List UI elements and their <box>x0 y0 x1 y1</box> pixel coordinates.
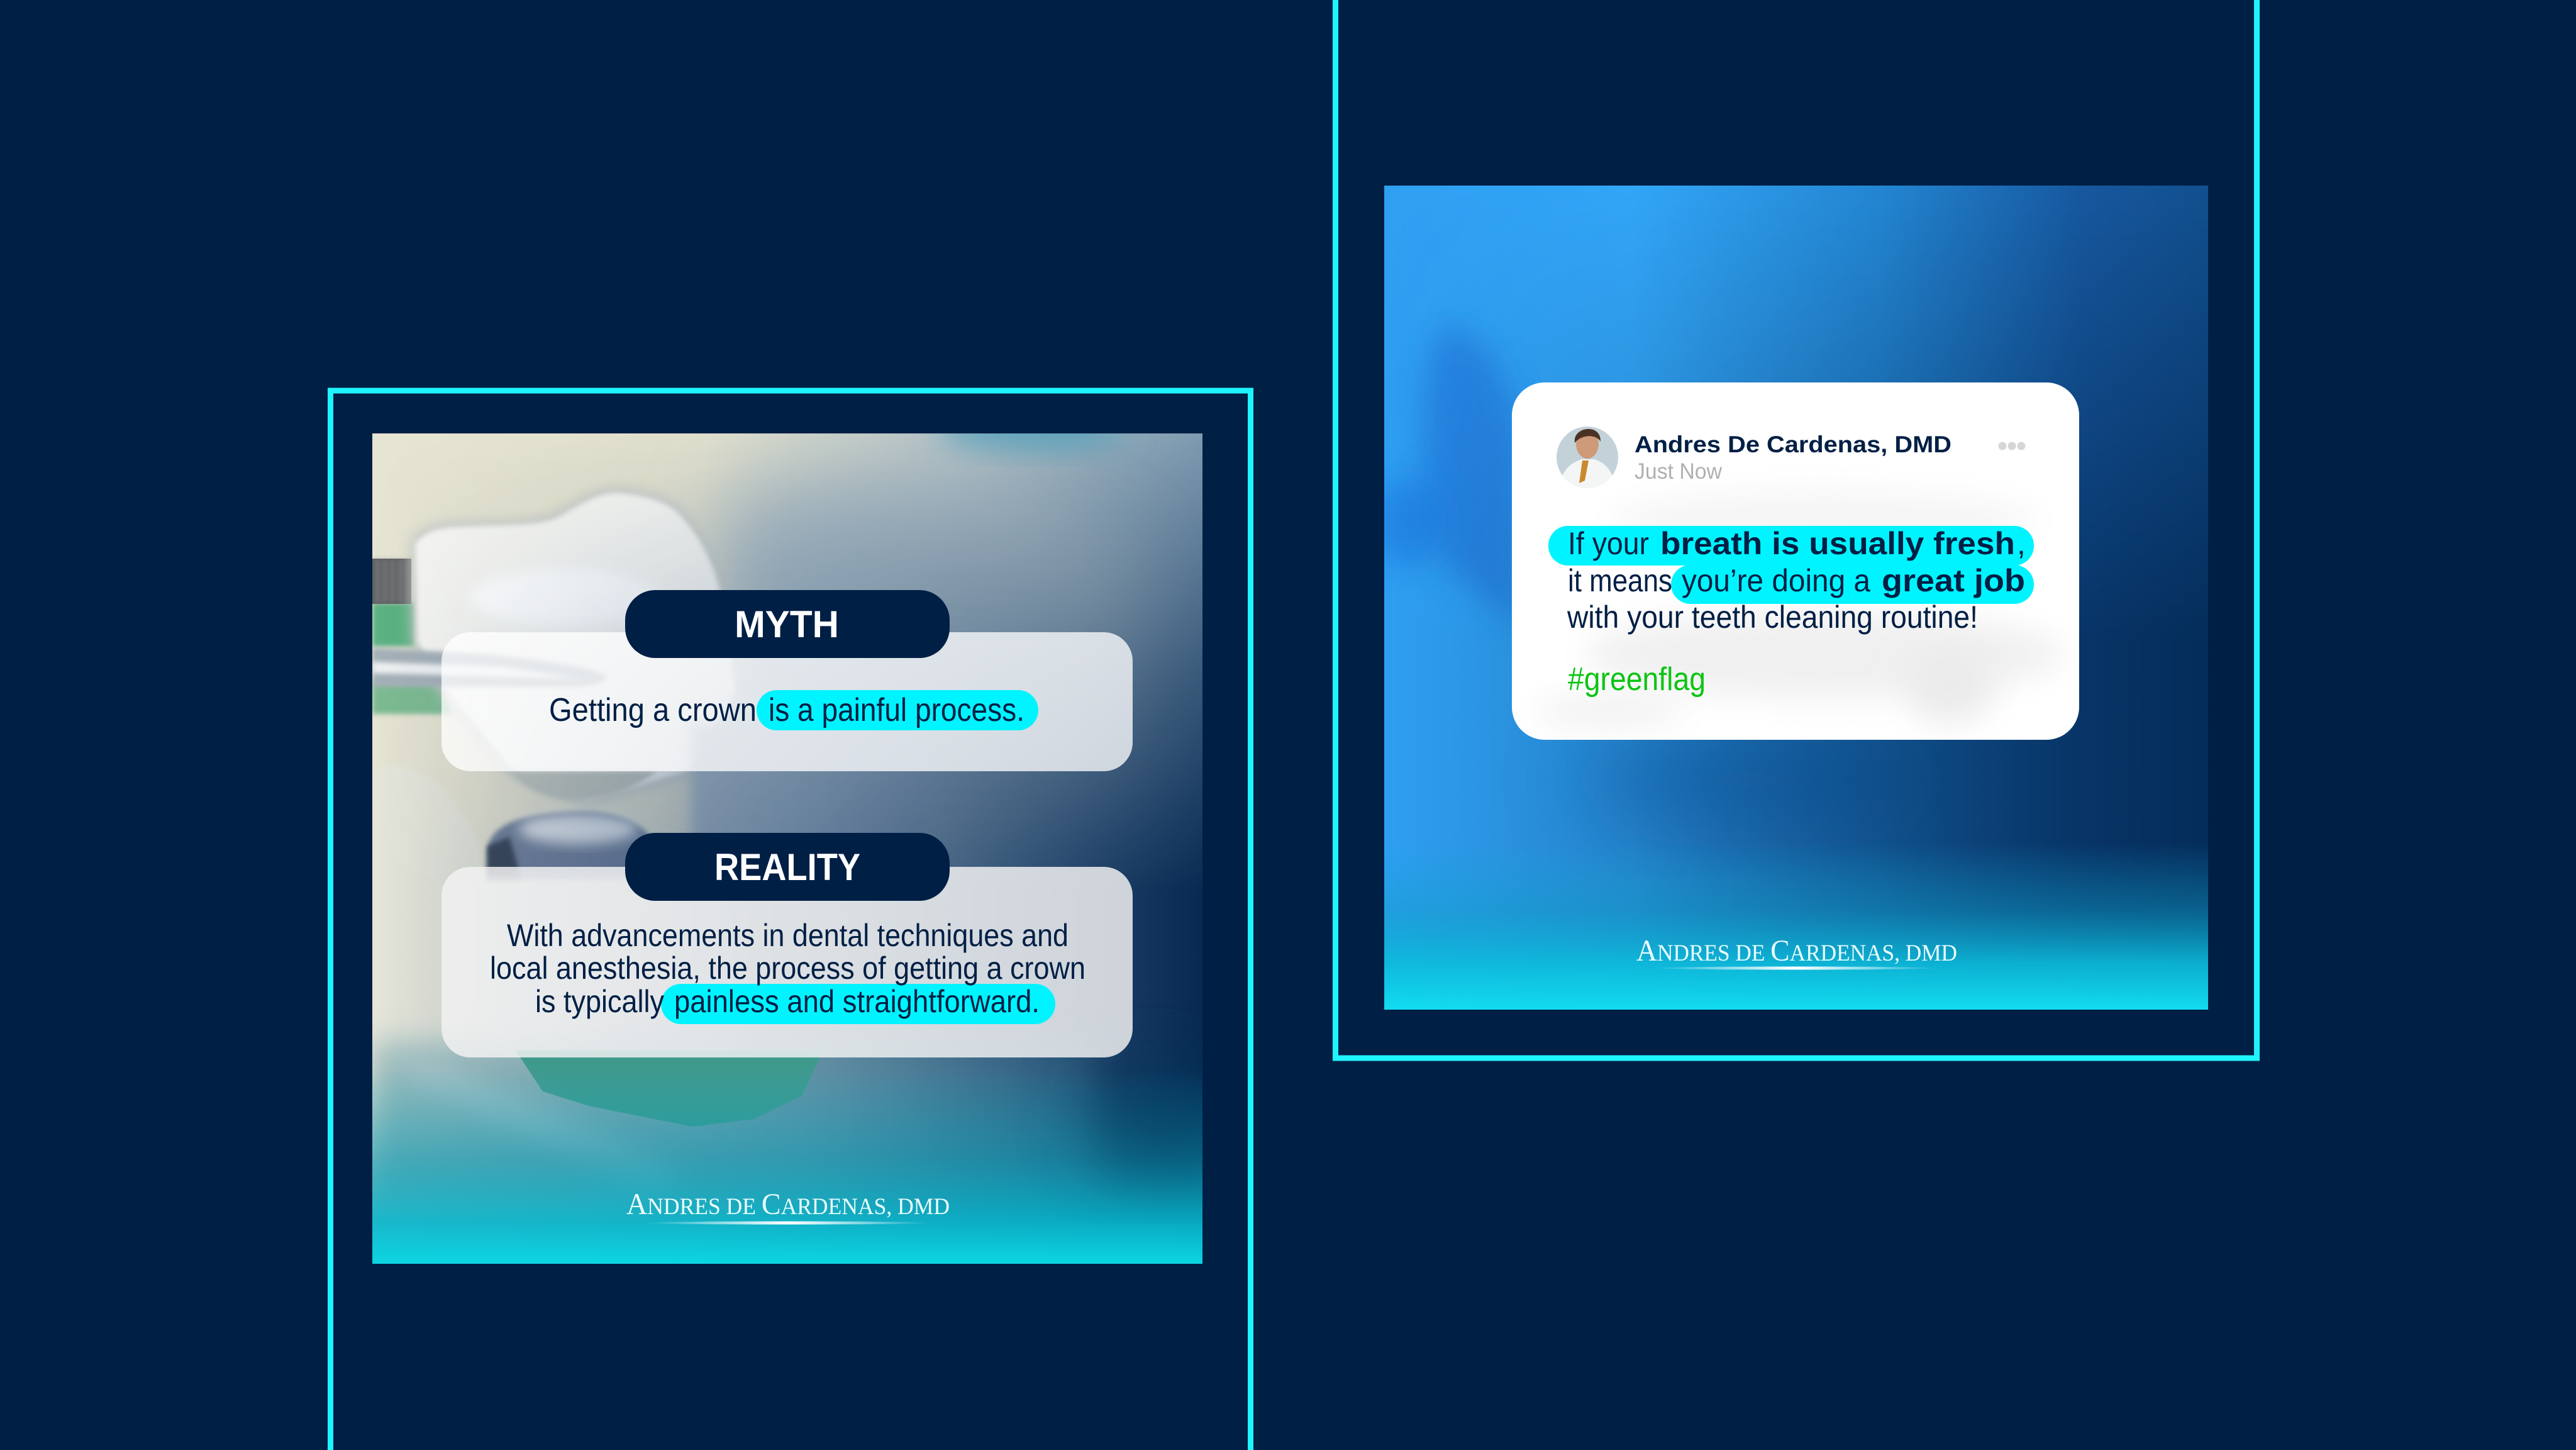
reality statement text: painless and straightforward. <box>674 984 1040 1019</box>
post message text: If your <box>1568 526 1649 561</box>
post message text: breath is usually fresh <box>1660 526 2015 561</box>
myth label pill <box>625 590 950 658</box>
myth statement text: Getting a crown <box>549 692 757 728</box>
highlight: line two <box>1671 565 2034 604</box>
blue blurred background <box>1371 186 2208 1010</box>
reality label pill <box>625 833 950 901</box>
reality statement text <box>490 918 1085 1019</box>
icon: doctor avatar <box>1557 427 1618 491</box>
highlight: line one <box>1548 526 2034 566</box>
myth statement text <box>549 692 1024 728</box>
panel: green flag social post <box>1336 0 2257 1058</box>
reality statement text: With advancements in dental techniques and <box>507 918 1069 953</box>
reality label pill: REALITY <box>714 846 860 888</box>
timestamp: Just Now <box>1635 459 1723 484</box>
myth card <box>441 590 1133 771</box>
panel: myth vs reality post <box>331 391 1250 1450</box>
post message text <box>1567 526 2026 635</box>
post message text: great job <box>1882 563 2025 598</box>
highlight: myth statement <box>757 690 1038 730</box>
myth statement text: is a painful process. <box>769 692 1024 728</box>
post card <box>1512 382 2079 740</box>
highlight: reality statement <box>661 984 1055 1024</box>
dental crown photo background <box>372 406 1226 1264</box>
post message text: you’re doing a <box>1682 563 1870 598</box>
reality statement text: local anesthesia, the process of getting a crown <box>490 951 1085 986</box>
post message text: with your teeth cleaning routine! <box>1567 600 1978 635</box>
icon: more dots <box>1999 442 2025 450</box>
post message text: it means <box>1568 563 1672 598</box>
author name: Andres De Cardenas, DMD <box>1635 432 1951 457</box>
logo: Andres de Cardenas, DMD (right): ANDRES DE CARDENAS, DMD <box>1636 934 1957 968</box>
reality statement text: is typically <box>535 984 664 1019</box>
myth label pill: MYTH <box>735 603 839 645</box>
right cyan frame <box>1336 0 2257 1058</box>
left cyan frame <box>331 391 1250 1450</box>
post message text: , <box>2017 526 2026 561</box>
reality card <box>441 833 1133 1057</box>
hashtag: #greenflag <box>1568 661 1706 698</box>
logo: Andres de Cardenas, DMD (left): ANDRES DE CARDENAS, DMD <box>626 1188 950 1221</box>
